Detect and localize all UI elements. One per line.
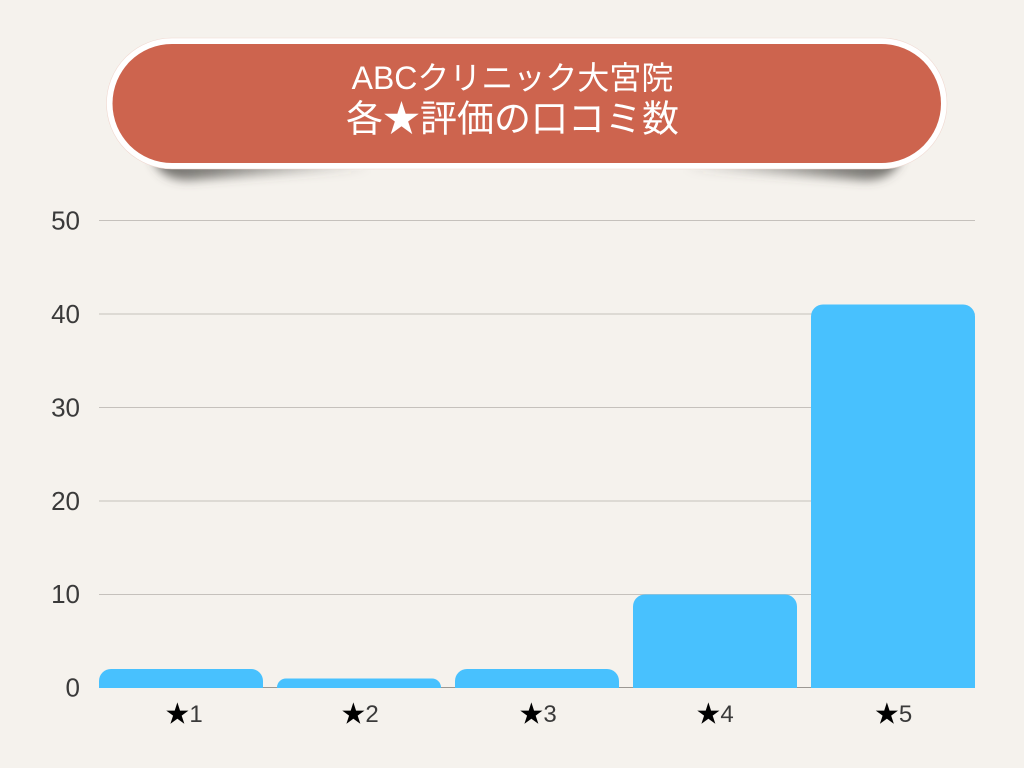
banner fill xyxy=(112,44,941,163)
bar: ★3 value 2 xyxy=(455,669,619,688)
title line 1: ABCクリニック大宮院 xyxy=(352,60,673,96)
bars xyxy=(99,304,975,688)
bar: ★2 value 1 xyxy=(277,678,441,688)
x-axis labels: ★2 xyxy=(341,701,379,728)
y-axis labels: 50 xyxy=(51,206,80,236)
banner shadow, right xyxy=(684,155,902,180)
x-axis labels: ★3 xyxy=(519,701,557,728)
bar chart xyxy=(51,206,975,728)
bar: ★1 value 2 xyxy=(99,669,263,688)
x-axis labels: ★1 xyxy=(165,701,203,728)
x-axis labels: ★5 xyxy=(875,701,912,728)
y-axis labels: 40 xyxy=(51,299,80,329)
y-axis labels xyxy=(51,206,80,702)
bar: ★4 value 10 xyxy=(633,594,797,688)
x-axis labels xyxy=(165,701,912,728)
y-axis labels: 0 xyxy=(66,672,80,702)
grid lines xyxy=(99,220,975,688)
banner white outline xyxy=(106,38,947,169)
y-axis labels: 10 xyxy=(51,579,80,609)
banner shadow, left xyxy=(152,155,370,180)
title line 2: 各★評価の口コミ数 xyxy=(346,98,679,140)
y-axis labels: 30 xyxy=(51,392,80,422)
x-axis labels: ★4 xyxy=(696,701,734,728)
bar: ★5 value 41 xyxy=(811,304,975,688)
y-axis labels: 20 xyxy=(51,486,80,516)
title banner xyxy=(106,38,947,180)
